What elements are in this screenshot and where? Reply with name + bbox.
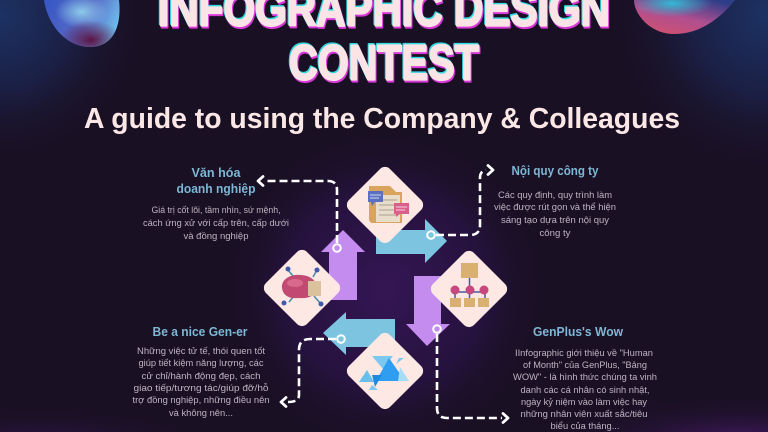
text block: Văn hóa doanh nghiệp: Giá trị cốt lõi, tầm nhìn, sứ mệnh, — [152, 205, 280, 215]
text block: GenPlus's Wow: biểu của tháng... — [550, 421, 620, 431]
title: CONTEST — [290, 38, 480, 92]
text block: GenPlus's Wow: ngày kỷ niệm vào làm việc hay — [521, 397, 648, 407]
arrow: purple up — [321, 230, 365, 300]
text block: Nội quy công ty — [494, 163, 616, 238]
decorative blob: top left — [44, 0, 120, 47]
arrow: cyan left — [323, 312, 395, 355]
connector: cyan right arrow to Nội quy — [427, 166, 493, 239]
text block: Be a nice Gen-er: Be a nice Gen-er — [152, 324, 248, 339]
arrow: cyan right — [376, 219, 447, 263]
decorative blob: top right — [634, 0, 735, 34]
panel: left diamond, brain icon — [261, 247, 343, 329]
text block: GenPlus's Wow: danh các cá nhân có sinh nhật, — [520, 385, 650, 395]
text block: Be a nice Gen-er: giúp tiết kiệm năng lượng, các — [138, 358, 264, 368]
icon: hierarchy chart — [450, 263, 489, 307]
title: CONTEST — [288, 35, 478, 89]
title — [157, 0, 611, 92]
text block: Nội quy công ty: công ty — [540, 228, 571, 238]
text block: Nội quy công ty: sáng tạo dựa trên nội quy — [501, 215, 610, 225]
panel: right diamond, org chart icon — [428, 248, 510, 330]
text block: Văn hóa doanh nghiệp: Văn hóa — [192, 165, 241, 180]
text block: Be a nice Gen-er — [132, 324, 270, 418]
text block: Nội quy công ty: Nội quy công ty — [512, 163, 599, 178]
panel: bottom diamond, triangles icon — [344, 330, 426, 412]
text block: GenPlus's Wow: GenPlus's Wow — [533, 324, 624, 339]
text block: Be a nice Gen-er: trợ đồng nghiệp, những điều nên — [132, 395, 270, 405]
text block: GenPlus's Wow: những nhân viên xuất sắc/tiêu — [520, 409, 648, 419]
connector: purple down arrow to GenPlus — [433, 325, 508, 422]
text block: Be a nice Gen-er: Những việc tử tế, thói quen tốt — [137, 346, 266, 356]
icon: blue triangles — [359, 356, 409, 390]
text block: GenPlus's Wow — [513, 324, 657, 431]
text block: Be a nice Gen-er: và không nên... — [169, 408, 233, 418]
icon: brain with nodes — [282, 266, 324, 306]
text block: Be a nice Gen-er: cử chỉ/hành động đẹp, cách — [142, 371, 261, 381]
text block: GenPlus's Wow: WOW" - là hình thức chúng ta vinh — [513, 372, 657, 382]
text block: Văn hóa doanh nghiệp: doanh nghiệp — [176, 181, 256, 196]
title: CONTEST — [289, 36, 479, 90]
text block: GenPlus's Wow: of Month" của GenPlus, "Bảng — [523, 360, 647, 370]
text block: Nội quy công ty: Các quy định, quy trình làm — [498, 190, 612, 200]
text block: GenPlus's Wow: IInfographic giới thiệu về "Human — [515, 348, 653, 358]
text block: Nội quy công ty: việc được rút gọn và thể hiện — [494, 202, 616, 212]
text block: Văn hóa doanh nghiệp: và đồng nghiệp — [184, 231, 249, 241]
connector: cyan left arrow to Be a nice Gen-er — [281, 335, 345, 406]
text block: Văn hóa doanh nghiệp: cách ứng xử với cấp trên, cấp dưới — [143, 218, 289, 228]
text block: Be a nice Gen-er: giao tiếp/tương tác/giúp đỡ/hỗ — [134, 383, 269, 393]
panel: top diamond, document icon — [344, 164, 426, 246]
connector: purple up arrow to Văn hóa — [258, 176, 341, 252]
icon: document folder — [368, 186, 409, 223]
arrow: purple down — [406, 276, 450, 346]
text block: Văn hóa doanh nghiệp — [143, 165, 289, 241]
subtitle: A guide to using the Company & Colleagues — [84, 103, 680, 135]
